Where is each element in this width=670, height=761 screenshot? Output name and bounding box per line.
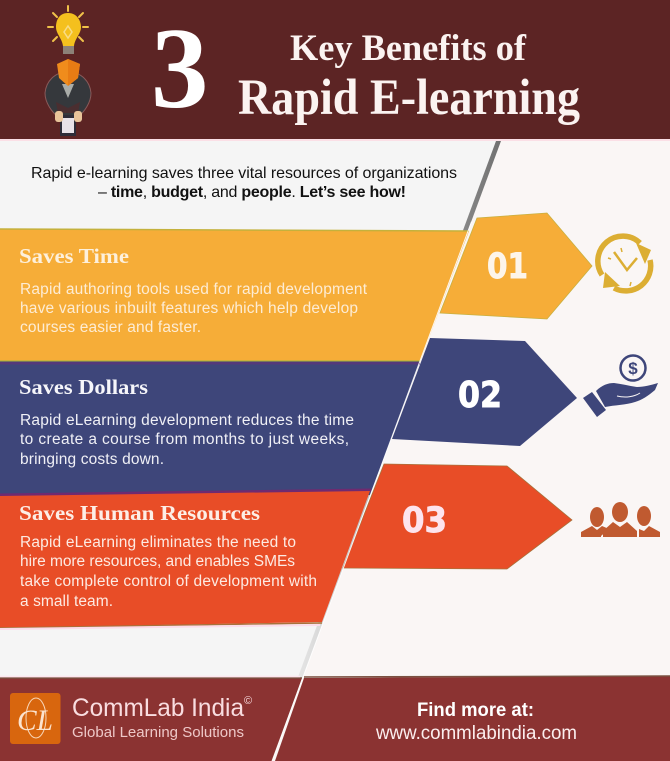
footer xyxy=(0,676,670,761)
find more at: Find more at: xyxy=(417,700,534,721)
body: saves dollars: Rapid eLearning development reduces the time xyxy=(20,412,354,429)
arrow 01 xyxy=(440,213,592,319)
body: saves human resources: Rapid eLearning eliminates the need to xyxy=(20,534,296,551)
intro text xyxy=(31,165,457,201)
arrow 03: 03 xyxy=(402,501,447,541)
logo: CommLab India: Global Learning Solutions xyxy=(72,724,244,741)
left light panel xyxy=(0,141,501,761)
title line one: Key Benefits of xyxy=(290,28,527,69)
body: saves time xyxy=(20,281,368,336)
body: saves time: have various inbuilt features which help develop xyxy=(20,300,358,317)
arrow 03 xyxy=(343,464,572,569)
body: saves time: Rapid authoring tools used for rapid development xyxy=(20,281,368,298)
panel: saves human resources xyxy=(0,491,370,629)
heading: saves dollars: Saves Dollars xyxy=(19,375,148,399)
big numeral 3: 3 xyxy=(151,5,208,132)
logo: CommLab India: © xyxy=(244,695,252,707)
icon: clock with arrows xyxy=(598,236,651,291)
logo: CommLab India: CommLab India xyxy=(72,694,244,722)
header banner xyxy=(0,0,670,141)
icon: light bulb and business person xyxy=(45,6,91,136)
body: saves dollars xyxy=(20,412,354,468)
arrow 01: 01 xyxy=(487,247,528,287)
body: saves dollars: to create a course from months to just weeks, xyxy=(20,431,349,448)
body: saves human resources: take complete control of development with xyxy=(20,573,317,590)
find more at: www.commlabindia.com xyxy=(375,723,577,744)
body: saves human resources: a small team. xyxy=(20,593,113,610)
body: saves human resources: hire more resources, and enables SMEs xyxy=(20,553,295,570)
logo: CommLab India xyxy=(10,693,252,744)
panel: saves dollars xyxy=(0,362,420,496)
panel: saves time xyxy=(0,229,469,362)
title line two: Rapid E-learning xyxy=(238,70,580,126)
arrow 02: 02 xyxy=(458,375,502,416)
body: saves human resources xyxy=(20,534,317,610)
icon: three people xyxy=(581,502,660,537)
body: saves dollars: bringing costs down. xyxy=(20,451,164,468)
body: saves time: courses easier and faster. xyxy=(20,319,201,336)
intro text: Rapid e-learning saves three vital resources of organizations xyxy=(31,165,457,182)
arrow 02 xyxy=(392,338,577,446)
icon: hand holding dollar coin xyxy=(583,356,658,417)
intro text: – time, budget, and people. Let’s see how! xyxy=(98,184,406,201)
heading: saves time: Saves Time xyxy=(19,244,129,268)
logo: CommLab India: CL xyxy=(17,704,53,737)
diagonal divider xyxy=(272,142,501,761)
icon: hand holding dollar coin: $ xyxy=(628,359,638,378)
find more at xyxy=(375,700,577,744)
heading: saves human resources: Saves Human Resources xyxy=(19,501,260,525)
